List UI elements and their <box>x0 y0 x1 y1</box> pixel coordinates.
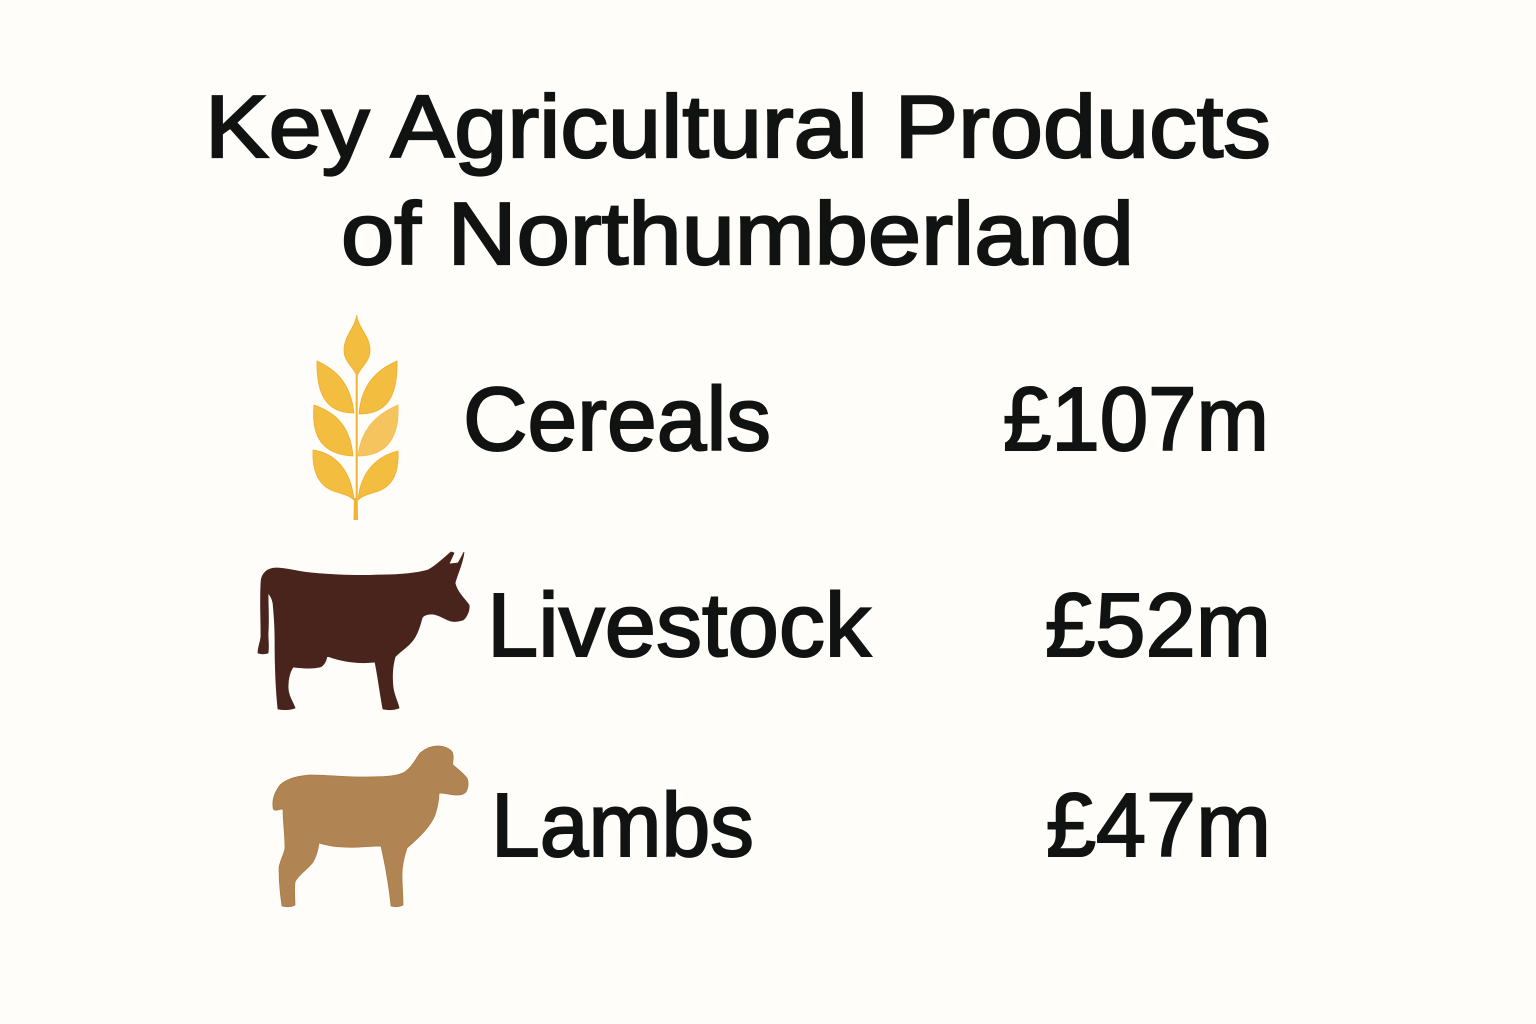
row: livestock <box>258 552 1271 710</box>
row: cereals <box>313 315 1269 520</box>
value: cereals: £107m <box>1003 370 1269 470</box>
icon: cow <box>258 552 469 710</box>
label: lambs: Lambs <box>491 776 754 876</box>
icon: wheat <box>313 315 398 520</box>
icon: lamb <box>273 746 468 907</box>
label: cereals: Cereals <box>463 370 771 470</box>
value: livestock: £52m <box>1045 576 1271 676</box>
row: lambs <box>273 746 1271 907</box>
title: of Northumberland <box>341 184 1134 283</box>
title <box>205 77 1271 283</box>
label: livestock: Livestock <box>487 576 872 676</box>
value: lambs: £47m <box>1046 776 1271 876</box>
title: Key Agricultural Products <box>205 77 1271 176</box>
